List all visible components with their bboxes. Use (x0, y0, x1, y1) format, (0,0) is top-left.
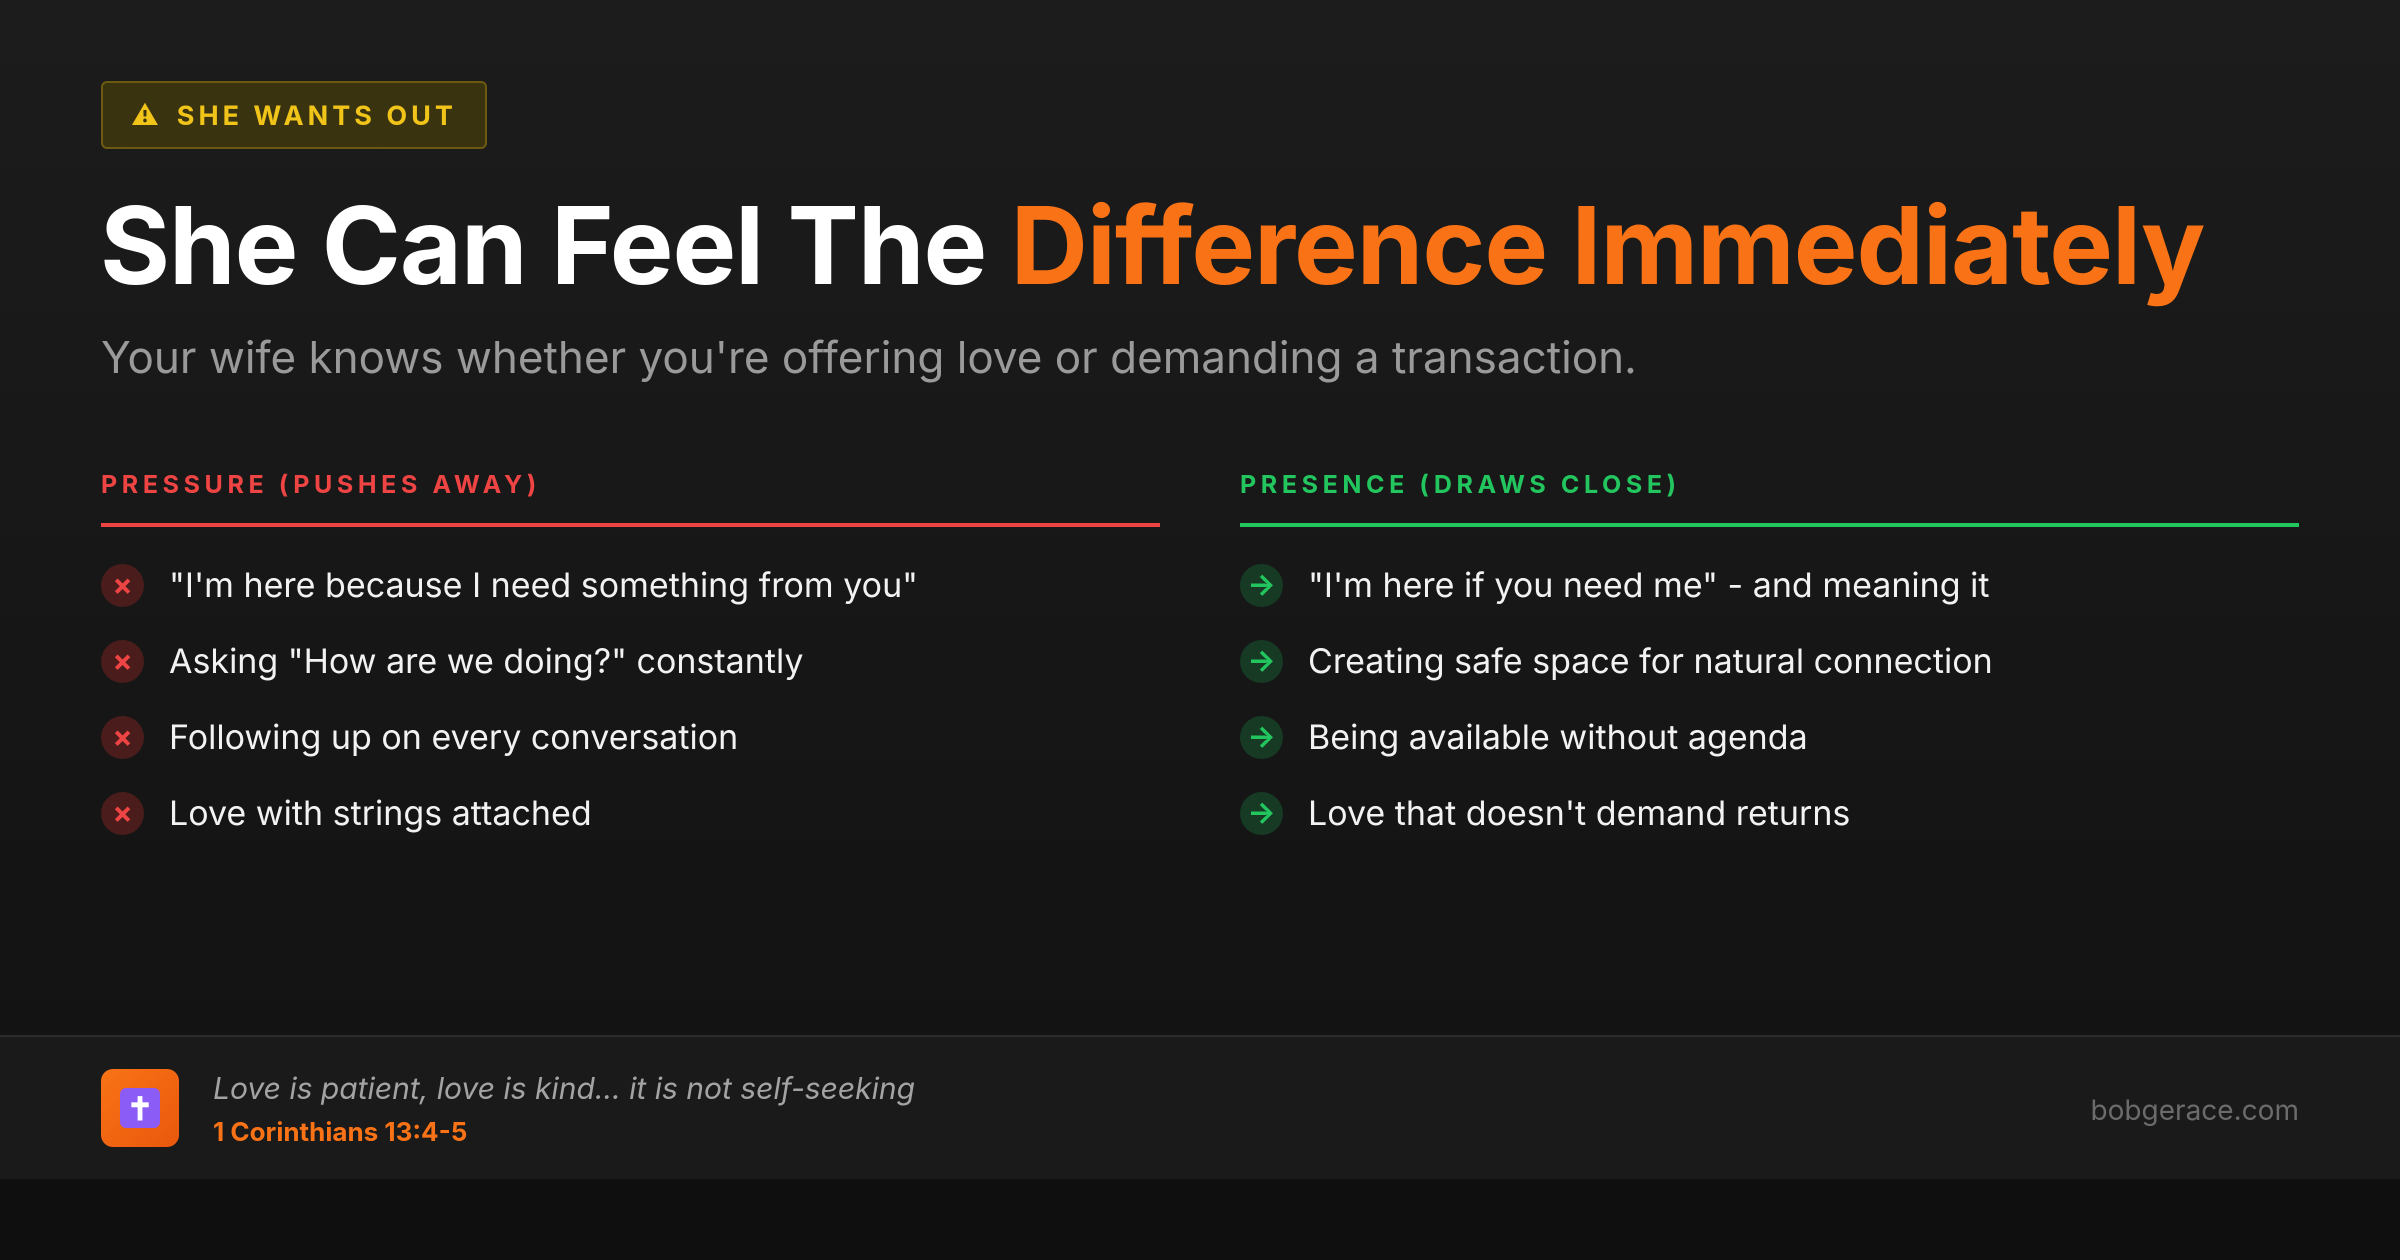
item 3: × (112, 719, 133, 755)
item 4: Love with strings attached (169, 792, 592, 834)
item 4: → (1247, 795, 1276, 831)
item 1: "I'm here if you need me" - and meaning it (1308, 564, 1990, 606)
reference: 1 Corinthians 13:4-5 (213, 1117, 467, 1148)
item 2: Creating safe space for natural connection (1308, 640, 1993, 682)
subtitle: Your wife knows whether you're offering love or demanding a transaction. (101, 330, 1637, 384)
item 2: → (1247, 643, 1276, 679)
item 3: → (1247, 719, 1276, 755)
title: She Can Feel The Difference Immediately (100, 180, 2204, 310)
heading: presence: PRESENCE (DRAWS CLOSE) (1240, 470, 1681, 500)
heading: pressure (101, 470, 1160, 527)
item 3: Following up on every conversation (169, 716, 738, 758)
heading: pressure: PRESSURE (PUSHES AWAY) (101, 470, 541, 500)
badge (101, 81, 487, 149)
item 3: Being available without agenda (1308, 716, 1808, 758)
item 4: × (112, 795, 133, 831)
item 1: → (1247, 567, 1276, 603)
heading: presence (1240, 470, 2299, 527)
quote: Love is patient, love is kind... it is not self-seeking (213, 1071, 915, 1107)
panel: pressure (101, 470, 1160, 835)
panel: presence (1240, 470, 2299, 835)
item 1: × (112, 567, 133, 603)
footer (0, 1035, 2400, 1179)
badge: ⚠ (131, 98, 163, 132)
item 2: × (112, 643, 133, 679)
site: bobgerace.com (2090, 1093, 2299, 1127)
badge: SHE WANTS OUT (177, 98, 457, 132)
icon: cross: ✝ (127, 1088, 153, 1128)
item 1: "I'm here because I need something from you" (169, 564, 918, 606)
item 4: Love that doesn't demand returns (1308, 792, 1850, 834)
item 2: Asking "How are we doing?" constantly (169, 640, 803, 682)
icon: cross (101, 1069, 179, 1147)
